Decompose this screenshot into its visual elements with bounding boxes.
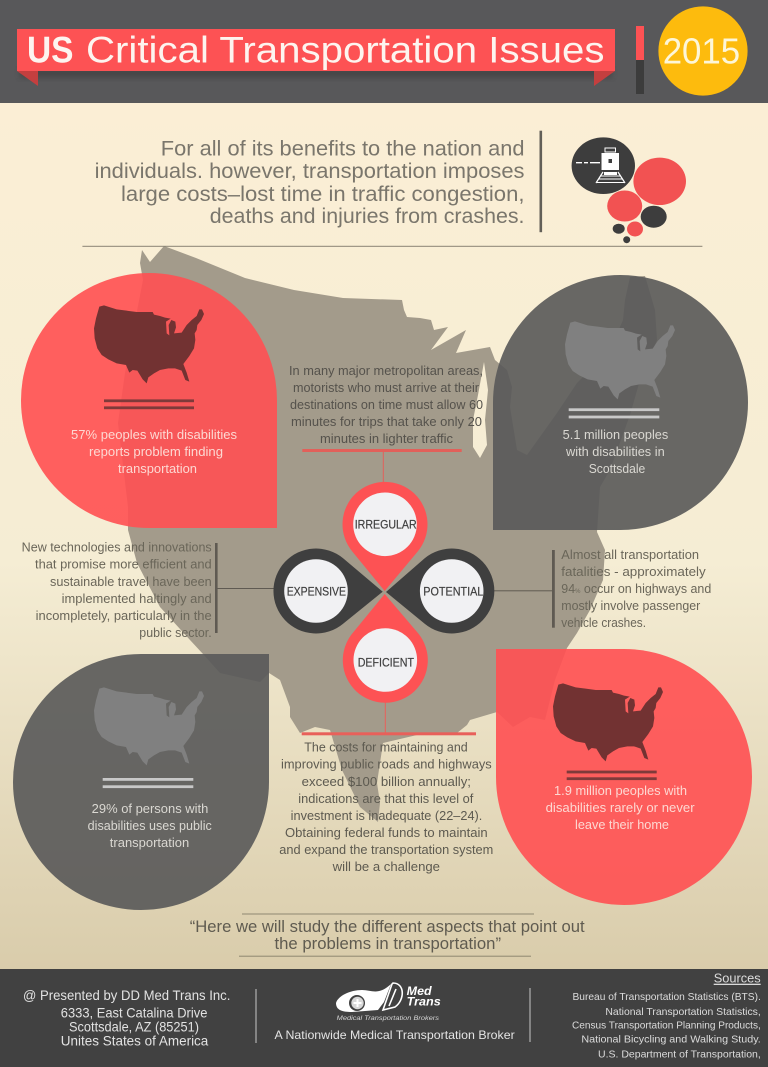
- text block: irregular: motorists who must arrive at their: [293, 381, 479, 395]
- connector: irregular: [302, 449, 462, 482]
- text block: expensive: New technologies and innovations: [22, 541, 212, 555]
- panel: 5.1 million peoples: with disabilities in: [565, 445, 665, 459]
- pin: deficient: [343, 594, 428, 703]
- title ribbon: US: [27, 30, 74, 70]
- pin: potential: POTENTIAL: [423, 586, 484, 598]
- icon: train in thought bubbles: [572, 137, 686, 243]
- intro text: [95, 138, 524, 228]
- text block: irregular: minutes for trips that take only 20: [291, 415, 482, 429]
- quote: “Here we will study the different aspects that point out: [190, 917, 585, 936]
- footer: sources: Bureau of Transportation Statistics (BTS).: [572, 991, 761, 1003]
- panel: 29% of persons: [13, 654, 269, 910]
- panel: 57% peoples with disabilities: [21, 273, 277, 528]
- panel: 5.1 million peoples: 5.1 million peoples: [563, 428, 668, 442]
- text block: potential: [561, 548, 711, 630]
- text block: potential: 94% occur on highways and: [561, 582, 711, 596]
- title ribbon: [17, 29, 615, 86]
- footer divider left: [256, 989, 257, 1043]
- panel: 29% of persons: 29% of persons with: [92, 802, 208, 816]
- large background map of the US: [118, 246, 657, 822]
- footer: sources: U.S. Department of Transportation,: [598, 1048, 761, 1060]
- text block: expensive: implemented haltingly and: [62, 592, 212, 606]
- divider under intro: [82, 246, 702, 247]
- footer: sources: Sources: [714, 971, 761, 986]
- pin: irregular: IRREGULAR: [355, 519, 417, 531]
- intro vertical rule: [540, 131, 542, 232]
- panel: 57% peoples with disabilities: 57% peoples with disabilities: [71, 428, 237, 442]
- text block: irregular: In many major metropolitan areas,: [289, 364, 483, 378]
- panel: 1.9 million peoples: 1.9 million peoples with: [554, 784, 687, 798]
- logo: Med Trans: [336, 983, 441, 1022]
- footer: address: Scottsdale, AZ (85251): [69, 1019, 199, 1035]
- pin: potential: [386, 548, 494, 634]
- footer: sources: National Bicycling and Walking Study.: [581, 1034, 761, 1046]
- footer divider right: [530, 988, 531, 1042]
- year badge: 2015: [663, 30, 740, 72]
- pin: expensive: [273, 548, 383, 634]
- intro text: individuals. however, transportation imposes: [95, 160, 524, 183]
- panel: 1.9 million peoples: leave their home: [575, 818, 669, 832]
- footer: address: 6333, East Catalina Drive: [61, 1005, 208, 1021]
- pin: deficient: DEFICIENT: [358, 658, 414, 670]
- panel: 1.9 million peoples: disabilities rarely or never: [546, 801, 695, 815]
- connector: expensive: [215, 543, 275, 633]
- text block: deficient: and expand the transportation system: [279, 843, 493, 857]
- panel: 5.1 million peoples: Scottsdale: [589, 462, 645, 476]
- text block: deficient: will be a challenge: [332, 860, 440, 874]
- text block: deficient: exceed $100 billion annually;: [302, 775, 471, 789]
- text block: deficient: improving public roads and highways: [281, 758, 492, 772]
- quote: the problems in transportation”: [274, 934, 501, 953]
- text block: deficient: The costs for maintaining and: [304, 741, 468, 755]
- panel: 29% of persons: disabilities uses public: [88, 819, 212, 833]
- pin: expensive: EXPENSIVE: [287, 586, 346, 598]
- text block: potential: Almost all transportation: [561, 548, 699, 562]
- footer: sources: [572, 971, 761, 1060]
- connector: potential: [494, 550, 555, 628]
- year badge: [658, 6, 748, 96]
- panel: 29% of persons: transportation: [110, 836, 189, 850]
- text block: expensive: [22, 541, 212, 640]
- logo: Med Trans: Med: [407, 986, 433, 998]
- icon: US map, dark red lower: [553, 683, 663, 761]
- intro text: large costs–lost time in traffic congestion,: [121, 183, 524, 206]
- logo: Med Trans: Medical Transportation Brokers: [337, 1015, 440, 1022]
- footer: sources: Census Transportation Planning Products,: [572, 1020, 761, 1032]
- intro text: For all of its benefits to the nation and: [161, 138, 525, 161]
- text block: potential: fatalities - approximately: [561, 565, 706, 579]
- icon: US map, dark red: [94, 305, 204, 383]
- text block: potential: vehicle crashes.: [561, 616, 646, 630]
- text block: deficient: Obtaining federal funds to maintain: [285, 826, 488, 840]
- footer: address: [23, 987, 230, 1049]
- text block: deficient: indications are that this level of: [298, 792, 474, 806]
- footer: address: @ Presented by DD Med Trans Inc.: [23, 987, 230, 1003]
- footer tagline: A Nationwide Medical Transportation Broker: [274, 1028, 515, 1042]
- panel: 57% peoples with disabilities: reports problem finding: [89, 445, 223, 459]
- panel: 1.9 million peoples: [496, 649, 752, 905]
- icon: US map, grey: [565, 321, 675, 399]
- pin: irregular: [342, 482, 428, 591]
- panel: 5.1 million peoples: [493, 275, 748, 530]
- connector: deficient: [302, 702, 476, 735]
- text block: expensive: incompletely, particularly in the: [36, 609, 212, 623]
- intro text: deaths and injuries from crashes.: [210, 205, 525, 228]
- text block: deficient: investment is inadequate (22–24).: [291, 809, 482, 823]
- text block: expensive: sustainable travel have been: [50, 575, 212, 589]
- panel: 57% peoples with disabilities: transportation: [118, 462, 197, 476]
- footer band: [0, 969, 768, 1067]
- text block: irregular: [289, 364, 483, 446]
- text block: irregular: destinations on time must allow 60: [290, 398, 483, 412]
- quote: [190, 914, 585, 957]
- logo: Med Trans: Trans: [407, 997, 441, 1009]
- text block: expensive: public sector.: [139, 626, 212, 640]
- header band: [0, 0, 768, 103]
- header accent bar: [636, 26, 644, 94]
- text block: deficient: [279, 741, 493, 874]
- text block: expensive: that promise more efficient and: [35, 558, 212, 572]
- footer: address: Unites States of America: [61, 1033, 208, 1049]
- footer: sources: National Transportation Statistics,: [605, 1006, 761, 1018]
- text block: potential: mostly involve passenger: [561, 599, 700, 613]
- icon: US map, grey lower: [94, 687, 204, 765]
- text block: irregular: minutes in lighter traffic: [320, 432, 453, 446]
- title ribbon: Critical Transportation Issues: [86, 30, 604, 70]
